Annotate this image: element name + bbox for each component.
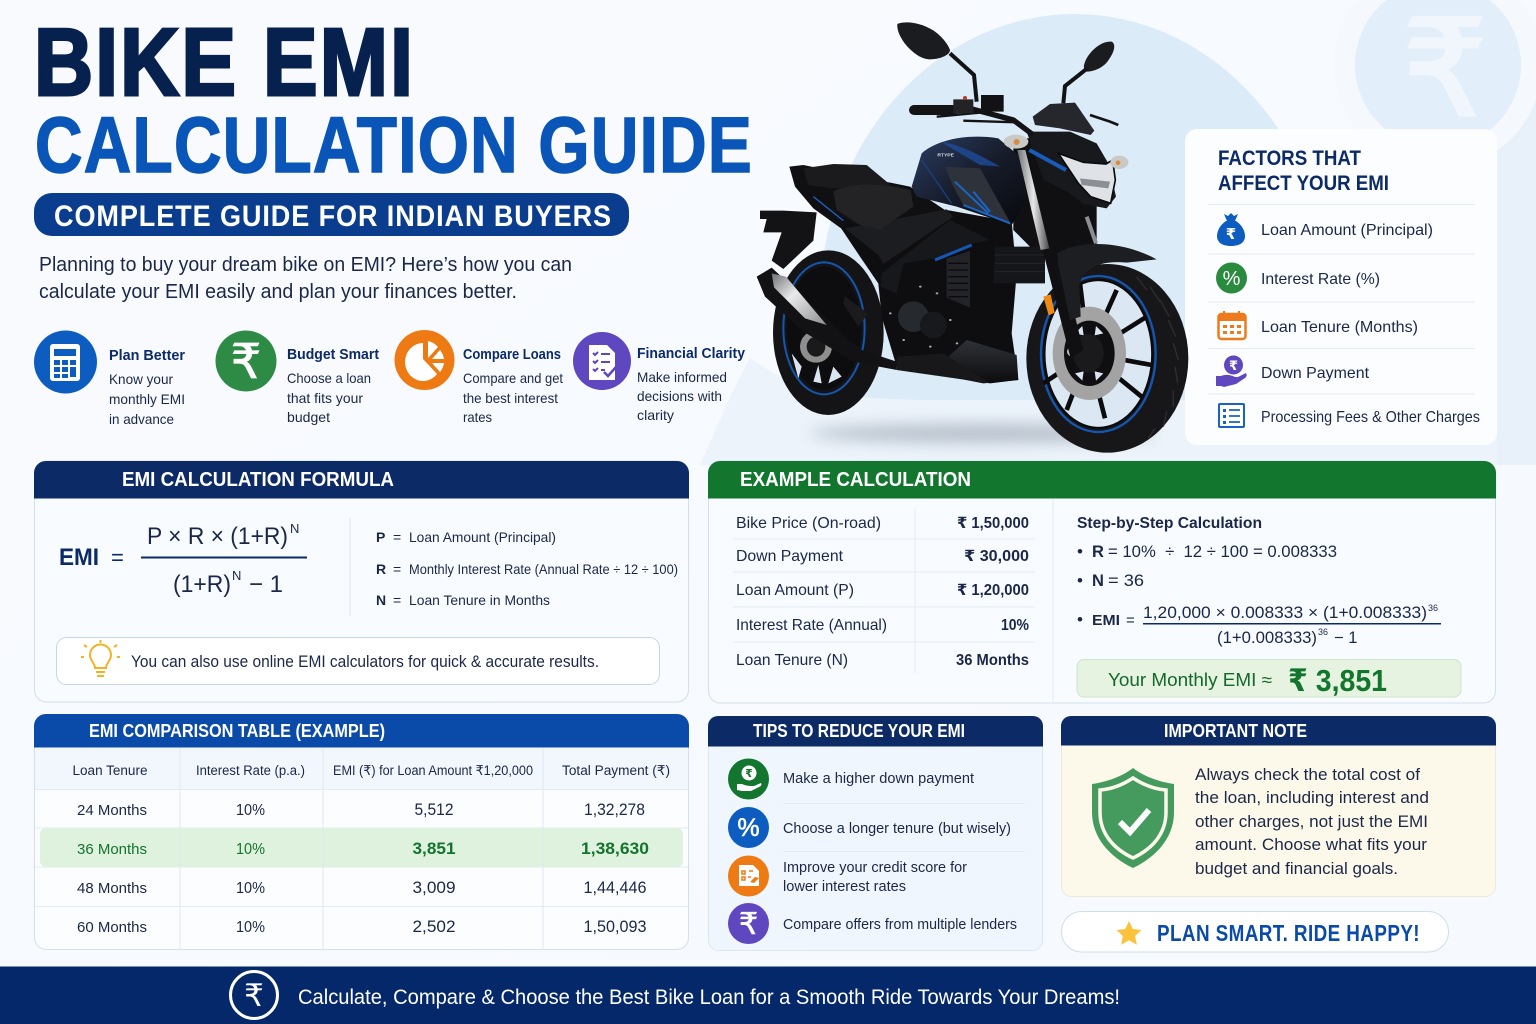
note text: the loan, including interest and [1195,788,1429,807]
panel: important note [1061,716,1496,896]
icon: hand with coin [1216,356,1247,387]
highlighted row [40,828,683,867]
panel: factors that affect your EMI: Processing Fees & Other Charges [1261,409,1480,426]
header [708,716,1043,746]
row: 60 months: 1,50,093 [584,917,646,936]
front wheel [1026,264,1188,453]
benefit: plan better: Know your [109,371,173,387]
formula: EMI [59,544,99,571]
result: monthly EMI: Your Monthly EMI ≈ [1108,670,1272,690]
benefit: budget smart [216,330,379,425]
tip: credit score: Improve your credit score for [783,860,967,876]
tip: compare offers: ₹ [739,908,758,941]
fuel tank [912,137,1027,225]
icon: rupee circle [230,972,278,1018]
panel: EMI comparison table [34,714,689,950]
loan details table: ₹ 1,50,000 [957,515,1029,532]
left mirror [897,22,977,102]
row: 60 months [77,917,646,936]
title: CALCULATION GUIDE [35,100,753,189]
table header row: EMI (₹) for Loan Amount ₹1,20,000 [333,763,533,778]
variable definitions: N [376,592,386,608]
tip: down payment: ₹ [745,768,753,780]
panel: factors that affect your EMI: FACTORS THAT [1218,147,1361,170]
handlebar [914,95,1118,135]
icon: percent: % [1223,268,1241,290]
row: 48 months: 1,44,446 [584,878,646,897]
row: 36 months: 36 Months [77,841,147,858]
header: IMPORTANT NOTE [1164,721,1307,741]
benefit: financial clarity: Financial Clarity [637,346,745,362]
loan details table: Interest Rate (Annual) [736,617,887,634]
step by step calculation: • [1077,542,1083,561]
tip: longer tenure [728,807,1011,848]
tip: credit score: lower interest rates [783,879,906,895]
formula: P × R × (1+R) [147,523,288,550]
right mirror [1063,42,1114,103]
frame and engine [840,209,1045,383]
row: 24 months: 1,32,278 [584,800,645,819]
slogan pill [1062,912,1448,952]
bike silhouette underlay [789,133,1097,287]
loan details table: Down Payment [736,548,844,565]
table header row: Total Payment (₹) [562,763,670,778]
benefit: plan better: monthly EMI [109,391,185,407]
tip: down payment [728,758,974,800]
benefit: financial clarity: Make informed [637,369,727,385]
icon: fee list [1219,404,1244,427]
table header row [72,763,670,778]
benefit: financial clarity: clarity [637,407,674,423]
table header row: Interest Rate (p.a.) [196,763,305,778]
panel: example calculation [708,461,1496,703]
reflector [1043,294,1055,315]
loan details table: 36 Months [956,652,1029,669]
headlight cowl [1027,103,1116,208]
icon: rupee green [216,330,276,392]
tip: down payment: Make a higher down payment [783,771,974,787]
slogan pill: PLAN SMART. RIDE HAPPY! [1157,920,1420,946]
panel: factors that affect your EMI: AFFECT YOUR EMI [1218,172,1389,195]
formula: − 1 [249,571,283,598]
row: 48 months: 10% [236,880,265,897]
formula: = [111,545,124,570]
decorative rupee circle [1355,0,1521,148]
icon: shield with check [1092,768,1174,868]
step by step calculation: R [1092,543,1104,561]
loan details table: Bike Price (On-road) [736,515,881,532]
icon: checklist [573,332,631,390]
row: 36 months: 3,851 [412,839,456,858]
row: 60 months: 2,502 [412,917,456,936]
benefit: compare loans: Compare and get [463,370,563,386]
intro text: Planning to buy your dream bike on EMI? Here’s how you can [39,254,572,276]
benefit: plan better [34,330,185,427]
header [1061,716,1496,746]
loan details table: ₹ 1,20,000 [957,582,1029,599]
icon: star [1116,921,1142,945]
rear wheel [773,250,884,415]
row: 36 months: 10% [236,841,265,858]
panel: factors that affect your EMI: Loan Amount (Principal) [1261,222,1433,239]
formula: N [290,521,299,536]
step by step calculation: 36 [1318,627,1328,637]
benefit: budget smart: Budget Smart [287,347,379,363]
tip: compare offers: Compare offers from multiple lenders [783,917,1017,933]
icon: calculator [34,330,97,394]
step by step calculation: Step-by-Step Calculation [1077,515,1262,532]
variable definitions: P [376,529,385,545]
icon: rupee circle: ₹ [244,978,264,1013]
header [708,461,1496,498]
subtitle pill: COMPLETE GUIDE FOR INDIAN BUYERS [54,200,612,233]
icon: calendar [1218,311,1246,339]
panel: factors that affect your EMI [1185,129,1497,445]
icon: money bag: ₹ [1226,226,1236,243]
footer banner: Calculate, Compare & Choose the Best Bike Loan for a Smooth Ride Towards Your Dreams! [298,986,1120,1009]
variable definitions: = [393,561,401,577]
panel: factors that affect your EMI: Down Payment [1261,365,1370,382]
row: 48 months: 48 Months [77,880,147,897]
intro text: calculate your EMI easily and plan your finances better. [39,281,517,303]
benefit: plan better: Plan Better [109,348,185,364]
header [34,714,689,748]
benefit: plan better: in advance [109,411,174,427]
tip: longer tenure: % [737,814,760,842]
front mudguard [1057,244,1157,320]
formula [59,521,307,598]
benefit: financial clarity [573,332,745,423]
step by step calculation: 36 [1428,603,1438,613]
result: monthly EMI: ₹ 3,851 [1288,663,1387,698]
panel: EMI calculation formula [34,461,689,702]
row: 48 months: 3,009 [412,878,456,897]
note text: amount. Choose what fits your [1195,835,1427,854]
variable definitions [376,529,678,608]
formula: (1+R) [173,571,231,598]
intro text [39,254,572,303]
row: 24 months: 24 Months [77,802,147,819]
muffler [757,268,897,370]
loan details table: Loan Tenure (N) [736,652,848,669]
row: 24 months: 10% [236,802,265,819]
panel: factors that affect your EMI: Loan Tenure (Months) [1261,319,1418,336]
icon: percent [1216,262,1247,294]
step by step calculation: = 10% ÷ 12 ÷ 100 = 0.008333 [1108,543,1337,561]
variable definitions: = [393,592,401,608]
header: EXAMPLE CALCULATION [740,469,971,491]
front fork [1017,150,1096,358]
row: 24 months [77,800,645,819]
panel: tips to reduce EMI [708,716,1043,950]
icon: money bag [1217,213,1245,246]
step by step calculation: N [1092,572,1104,590]
icon: hand with coin: ₹ [1229,358,1238,373]
variable definitions: R [376,561,386,577]
benefit: financial clarity: decisions with [637,388,722,404]
panel: factors that affect your EMI: Interest Rate (%) [1261,271,1380,288]
icon: rupee green: ₹ [231,336,261,389]
step by step calculation: − 1 [1334,629,1357,647]
loan details table [736,515,1029,669]
row: 24 months: 5,512 [414,800,454,819]
tip: compare offers [728,903,1017,944]
table header row: Loan Tenure [72,763,148,778]
seat [803,164,913,229]
title [34,9,753,189]
header: TIPS TO REDUCE YOUR EMI [753,721,965,741]
benefit: compare loans [394,330,563,425]
footer banner [0,966,1536,1024]
benefit: compare loans: rates [463,409,492,425]
note text: Always check the total cost of [1195,765,1420,784]
note text: budget and financial goals. [1195,859,1398,878]
icon: pie chart [394,330,454,390]
header: EMI CALCULATION FORMULA [122,469,394,491]
formula: N [232,568,241,583]
callout: online calculators [56,638,660,684]
step by step calculation: (1+0.008333) [1217,629,1317,647]
step by step calculation: • [1077,610,1083,629]
icon: light bulb [81,640,120,676]
loan details table: Loan Amount (P) [736,582,854,599]
tip: longer tenure: Choose a longer tenure (but wisely) [783,821,1011,837]
step by step calculation: EMI [1092,612,1120,629]
loan details table: 10% [1001,617,1029,634]
step by step calculation: = 36 [1108,572,1144,590]
callout: online calculators: You can also use online EMI calculators for quick & accurate results. [131,652,599,671]
row: 60 months: 60 Months [77,919,147,936]
result: monthly EMI [1077,660,1461,698]
variable definitions: Monthly Interest Rate (Annual Rate ÷ 12 ÷ 100) [409,561,678,577]
benefit: compare loans: the best interest [463,390,558,406]
step by step calculation: • [1077,571,1083,590]
variable definitions: Loan Amount (Principal) [409,529,556,545]
row: 60 months: 10% [236,919,265,936]
header [34,461,689,498]
note text [1195,765,1429,878]
header: EMI COMPARISON TABLE (EXAMPLE) [89,721,385,741]
step by step calculation [1077,515,1441,647]
title: BIKE EMI [34,9,415,116]
step by step calculation: = [1126,612,1135,629]
row: 48 months [77,878,646,897]
fuel tank: RTYPE [937,153,955,159]
tip: credit score [728,856,967,896]
variable definitions: Loan Tenure in Months [409,592,550,608]
benefit: budget smart: that fits your [287,390,363,406]
row: 36 months: 1,38,630 [581,839,649,858]
rear fender and plate [760,211,817,269]
benefit: budget smart: Choose a loan [287,370,371,386]
turn signals [1004,135,1128,169]
note text: other charges, not just the EMI [1195,812,1428,831]
benefit: budget smart: budget [287,409,330,425]
step by step calculation: 1,20,000 × 0.008333 × (1+0.008333) [1143,604,1427,622]
variable definitions: = [393,529,401,545]
row: 36 months [77,839,649,858]
benefit: compare loans: Compare Loans [463,347,561,363]
loan details table: ₹ 30,000 [964,548,1029,565]
background shapes behind bike [700,0,1536,594]
motorcycle illustration [757,22,1188,453]
